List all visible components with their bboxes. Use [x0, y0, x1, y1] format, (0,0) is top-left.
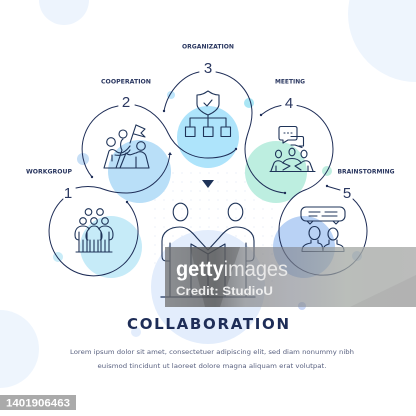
description text: euismod tincidunt ut laoreet dolore magna aliquam erat volutpat.	[98, 363, 326, 370]
central pale circle	[151, 230, 265, 344]
step numbers	[64, 60, 351, 202]
step numbers: 4	[285, 95, 293, 112]
dotted backdrop	[150, 172, 275, 297]
step labels: COOPERATION	[101, 78, 151, 86]
connecting circular path	[49, 72, 367, 276]
icon: cooperation team with flag	[104, 125, 149, 168]
step labels: BRAINSTORMING	[338, 168, 395, 176]
step numbers: 3	[204, 60, 212, 77]
title: COLLABORATION	[127, 315, 289, 333]
step labels	[26, 44, 395, 176]
corner circle: top right	[348, 0, 416, 82]
corner circle: bottom left	[0, 310, 39, 388]
icon: meeting with speech bubbles	[270, 126, 315, 172]
central icon: two people with book	[161, 203, 255, 297]
image id badge: 1401906463	[6, 398, 70, 410]
icon: workgroup	[75, 209, 113, 252]
step labels: MEETING	[275, 78, 305, 86]
step numbers: 5	[343, 185, 351, 202]
watermark band: Credit: StudioU	[176, 284, 273, 298]
corner circle: top left	[39, 0, 89, 25]
image id badge	[0, 395, 76, 410]
step labels: ORGANIZATION	[182, 44, 234, 50]
watermark band	[165, 247, 416, 307]
watermark band: gettyimages	[176, 258, 288, 281]
step labels: WORKGROUP	[26, 168, 73, 176]
description text: Lorem ipsum dolor sit amet, consectetuer adipiscing elit, sed diam nonummy nibh	[70, 349, 354, 356]
colour blobs behind icons	[53, 91, 362, 337]
description text	[70, 349, 354, 370]
icon: organization shield and chart	[186, 91, 230, 136]
icon: brainstorming	[301, 207, 345, 252]
arrow: pointing down	[202, 180, 214, 188]
step numbers: 1	[64, 185, 72, 202]
step numbers: 2	[122, 94, 130, 111]
